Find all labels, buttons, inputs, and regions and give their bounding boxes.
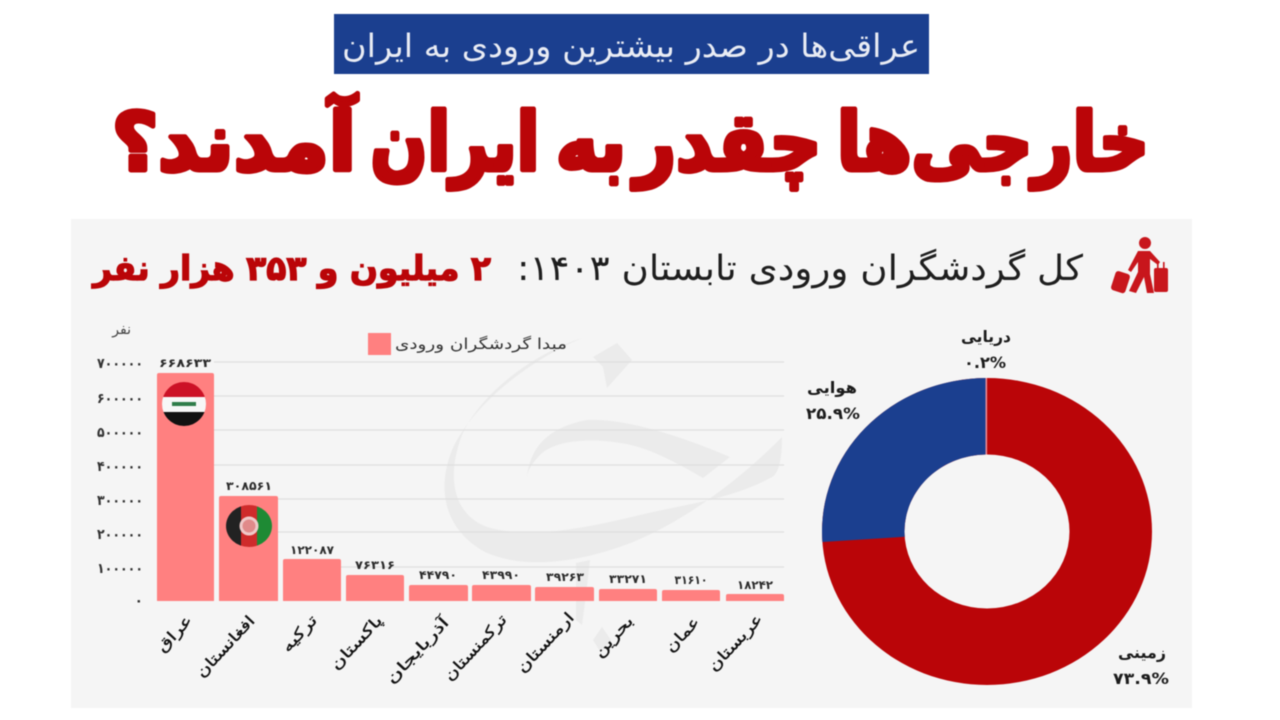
segment: air 25.9% (822, 378, 986, 542)
donut label: air (806, 378, 860, 423)
donut label: air: هوایی (807, 378, 857, 397)
x axis country labels: بحرین (590, 612, 637, 661)
donut chart: arrival modes (822, 378, 1152, 685)
bar value labels: ۴۴۷۹۰ (419, 568, 457, 582)
bar value labels (159, 356, 774, 592)
bar value labels: ۷۶۳۱۶ (355, 558, 395, 572)
bar chart: arrivals by origin (97, 322, 784, 687)
title: آمدند؟ (112, 93, 358, 189)
bar value labels: ۱۲۲۰۸۷ (290, 543, 335, 557)
panel: statistics (71, 219, 1192, 708)
donut label: sea (961, 327, 1011, 372)
x axis country labels: آذربایجان (382, 613, 453, 687)
y axis labels: ۲۰۰۰۰۰ (97, 527, 143, 543)
x axis country labels: عربستان (704, 610, 766, 675)
bar value labels: ۳۳۲۷۱ (609, 572, 647, 586)
y axis labels: ۱۰۰۰۰۰ (97, 561, 143, 577)
bars (157, 373, 784, 601)
y axis labels: ۷۰۰۰۰۰ (97, 356, 143, 372)
header banner (334, 14, 929, 74)
title: ایران (370, 96, 540, 190)
x axis country labels: ترکیه (278, 611, 321, 656)
x axis country labels: عمان (661, 613, 703, 656)
y axis labels: ۶۰۰۰۰۰ (97, 391, 143, 407)
y axis labels: ۰ (134, 593, 143, 609)
y axis labels: نفر (111, 322, 131, 338)
watermark logo (445, 338, 782, 653)
x axis country labels: ارمنستان (513, 609, 578, 677)
x axis country labels: پاکستان (327, 612, 387, 674)
donut label: land: ۷۳.۹% (1113, 669, 1169, 688)
donut label: land (1113, 643, 1169, 688)
donut label: sea: دریایی (961, 327, 1011, 346)
title: خارجی‌ها (837, 96, 1149, 190)
bar value labels: ۴۳۹۹۰ (482, 568, 520, 582)
x axis country labels: افغانستان (192, 612, 259, 681)
flag: Iraq (162, 382, 206, 427)
legend: مبدا گردشگران ورودی (395, 335, 567, 353)
segment: land 73.9% (822, 378, 1152, 685)
bar value labels: ۳۰۸۵۶۱ (226, 479, 272, 493)
subheading value: 2 million 353 thousand: ۲ میلیون و ۳۵۳ هزار نفر (91, 249, 491, 289)
title: چقدر (631, 96, 822, 190)
icon: traveller with suitcases (1110, 237, 1168, 294)
donut label: sea: ۰.۲% (964, 353, 1006, 372)
bar value labels: ۱۸۲۴۲ (737, 578, 774, 592)
bar value labels: ۶۶۸۶۳۳ (159, 356, 212, 370)
x axis country labels (153, 609, 766, 687)
title: به (556, 96, 626, 189)
y axis labels (97, 322, 143, 609)
header banner: عراقی‌ها در صدر بیشترین ورودی به ایران (342, 27, 920, 65)
x axis country labels: ترکمنستان (440, 611, 511, 684)
subheading: total arrivals: کل گردشگران ورودی تابستان ۱۴۰۳: (517, 248, 1083, 289)
donut label: air: ۲۵.۹% (806, 404, 860, 423)
bar value labels: ۳۱۶۱۰ (674, 573, 708, 587)
y axis labels: ۳۰۰۰۰۰ (97, 493, 143, 509)
y axis labels: ۴۰۰۰۰۰ (97, 459, 143, 475)
segment: sea 0.2% (986, 378, 987, 454)
donut label: land: زمینی (1118, 643, 1166, 662)
chart grid (214, 362, 784, 567)
flag: Afghanistan (226, 505, 272, 547)
legend (368, 333, 567, 355)
title (112, 93, 1149, 190)
x axis country labels: عراق (153, 611, 196, 656)
y axis labels: ۵۰۰۰۰۰ (97, 425, 143, 441)
bar value labels: ۳۹۲۶۳ (546, 570, 585, 584)
